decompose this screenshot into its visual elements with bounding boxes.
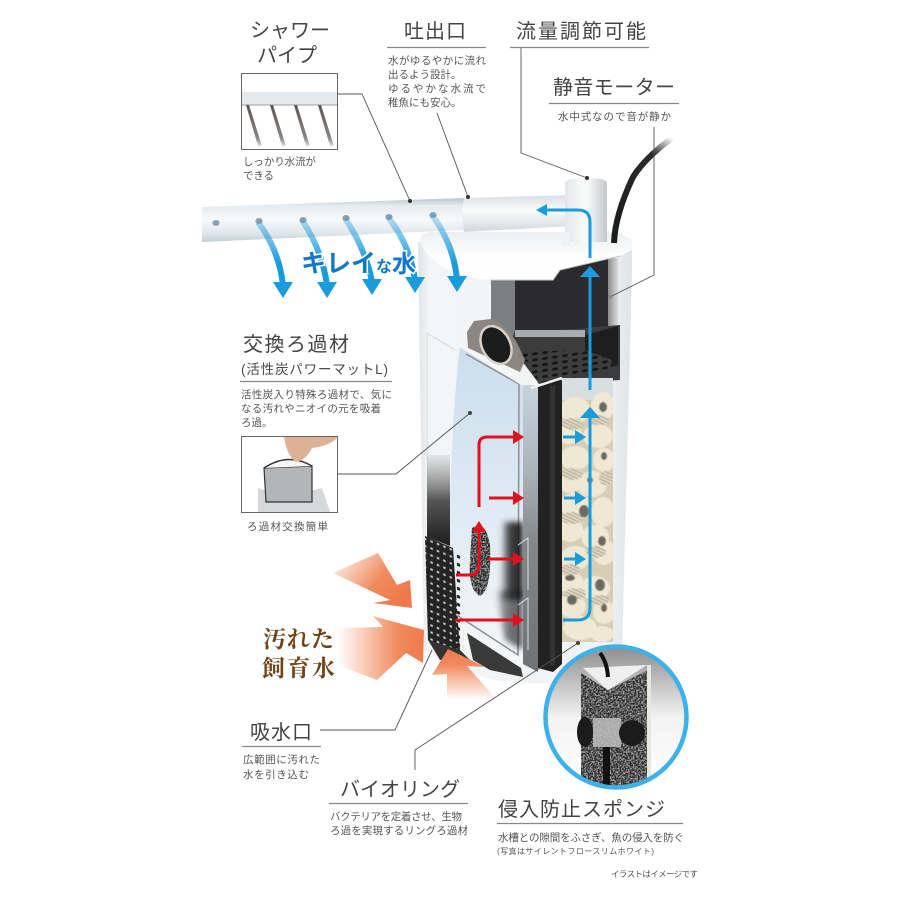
callout: outlet: 稚魚にも安心。: [388, 96, 462, 109]
callout: intrusion prevention sponge: [497, 798, 684, 856]
callout: water intake: 水を引き込む: [243, 768, 309, 781]
shower pipe: [202, 198, 464, 242]
callout: replacement filter media: [240, 333, 472, 533]
callout: replacement filter media: 活性炭入り特殊ろ過材で、気に: [241, 388, 392, 401]
callout: outlet: [387, 20, 486, 199]
callout: bio ring: バクテリアを定着させ、生物: [330, 810, 462, 823]
callout: replacement filter media: (活性炭パワーマットL): [241, 362, 388, 377]
dirty water label: 汚れた: [263, 627, 334, 652]
callout: silent motor: 水中式なので音が静か: [558, 110, 672, 123]
lid: [420, 232, 632, 280]
perforated shelf: [520, 350, 612, 386]
callout: shower pipe: [242, 20, 412, 203]
callout: silent motor: 静音モーター: [553, 76, 675, 99]
inset: shower pipe photo: [242, 74, 338, 150]
callout: bio ring: [329, 641, 580, 837]
callout: bio ring: ろ過を実現するリングろ過材: [330, 824, 468, 837]
intake grille: [425, 536, 472, 662]
filter body: [418, 242, 632, 683]
grey side panel: [523, 385, 538, 672]
callout: replacement filter media: 交換ろ過材: [243, 333, 349, 356]
callout: flow adjustment: 流量調節可能: [516, 20, 646, 43]
water outlet: [462, 178, 607, 246]
callout: intrusion prevention sponge: (写真はサイレントフロースリムホワイト): [497, 846, 654, 856]
sponge detail circle: [546, 646, 686, 790]
callout: water intake: 吸水口: [250, 721, 312, 744]
dark inner wall: [427, 455, 450, 546]
footnote: イラストはイメージです: [611, 869, 698, 879]
dirty water intake arrows: [333, 553, 495, 700]
filter mat cartridge: [450, 345, 525, 670]
callout: outlet: 出るよう設計。: [388, 69, 462, 81]
callout: replacement filter media: ろ過。: [241, 417, 272, 429]
callout: flow adjustment: [510, 20, 649, 180]
falling clean water arrows: [258, 215, 467, 298]
callout: replacement filter media: ろ過材交換簡単: [247, 520, 328, 533]
pump illustration: [202, 138, 672, 700]
callout: shower pipe: シャワー: [250, 20, 330, 42]
cartridge handle: [467, 319, 525, 372]
dirty water label: 飼育水: [262, 656, 335, 681]
clean water label: キレイな水: [301, 250, 416, 278]
callout: shower pipe: しっかり水流が: [243, 155, 316, 168]
sponge on mat: [470, 526, 490, 596]
callout: silent motor: [549, 76, 679, 299]
cartridge base: [467, 633, 523, 677]
red flow arrows: [455, 430, 524, 627]
motor and ring blue flow arrows: [563, 266, 600, 620]
upper dark chamber: [491, 258, 620, 385]
callout: replacement filter media: なる汚れやニオイの元を吸着: [241, 402, 381, 415]
black frame: [518, 378, 562, 672]
callout: outlet: 吐出口: [404, 20, 466, 43]
callout: shower pipe: パイプ: [257, 45, 317, 67]
callout: bio ring: バイオリング: [340, 778, 460, 801]
callout: outlet: 水がゆるやかに流れ: [388, 54, 486, 67]
dirty water label: [262, 627, 335, 681]
inset: media replacement photo: [242, 436, 338, 512]
bio-ring compartment: [561, 378, 613, 642]
power cord: [614, 138, 672, 243]
callout: water intake: 広範囲に汚れた: [243, 753, 320, 766]
outflow arrow: [536, 204, 590, 258]
body moulded panel outline: [427, 333, 455, 460]
suction cups: [577, 717, 645, 747]
callout: intrusion prevention sponge: 水槽との隙間をふさぎ、魚の侵入を防ぐ: [498, 831, 684, 844]
callout: outlet: ゆるやかな水流で: [388, 83, 486, 95]
callout: water intake: [242, 650, 432, 781]
callout: shower pipe: できる: [243, 170, 274, 182]
callout: intrusion prevention sponge: 侵入防止スポンジ: [498, 798, 665, 821]
foam sponge block: [581, 670, 648, 790]
